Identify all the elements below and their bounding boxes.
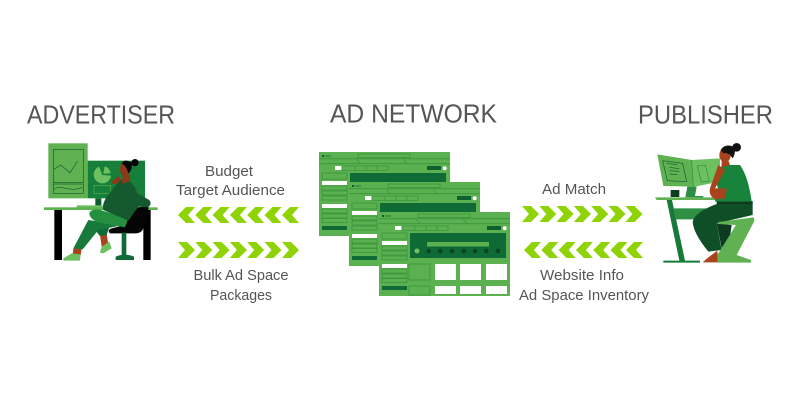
illustration: advertiser at desk	[44, 143, 158, 261]
label: bulk ad space packages	[194, 268, 288, 304]
label: ad match: Ad Match	[542, 182, 606, 198]
heading: publisher: PUBLISHER	[638, 102, 773, 130]
arrow: left row 1	[178, 207, 299, 223]
label: website info, ad space inventory	[519, 268, 650, 304]
heading: advertiser: ADVERTISER	[27, 102, 175, 130]
label: budget, target audience: Target Audience	[176, 183, 285, 199]
label: budget, target audience: Budget	[205, 164, 253, 180]
chart panel	[48, 143, 88, 198]
person	[693, 143, 753, 262]
heading: ad network: AD NETWORK	[330, 100, 497, 128]
arrow: right row 1	[178, 242, 299, 258]
arrow: left row 2	[524, 242, 643, 258]
monitors	[657, 154, 720, 197]
label: budget, target audience	[176, 164, 285, 199]
page middle	[349, 182, 480, 266]
page front	[379, 212, 510, 296]
desk	[44, 205, 158, 260]
stool	[717, 217, 754, 263]
label: bulk ad space packages: Bulk Ad Space	[194, 268, 288, 284]
person	[63, 159, 151, 261]
desk	[655, 197, 717, 263]
chair	[109, 206, 148, 260]
label: website info, ad space inventory: Ad Space Inventory	[519, 288, 650, 304]
illustration: publisher at desk	[655, 143, 754, 263]
monitor	[88, 161, 145, 208]
label: website info, ad space inventory: Website Info	[540, 268, 624, 284]
label: bulk ad space packages: Packages	[210, 288, 272, 304]
page back	[319, 152, 450, 236]
arrow: right row 2	[522, 206, 642, 222]
illustration: stacked ad network pages	[319, 152, 510, 296]
